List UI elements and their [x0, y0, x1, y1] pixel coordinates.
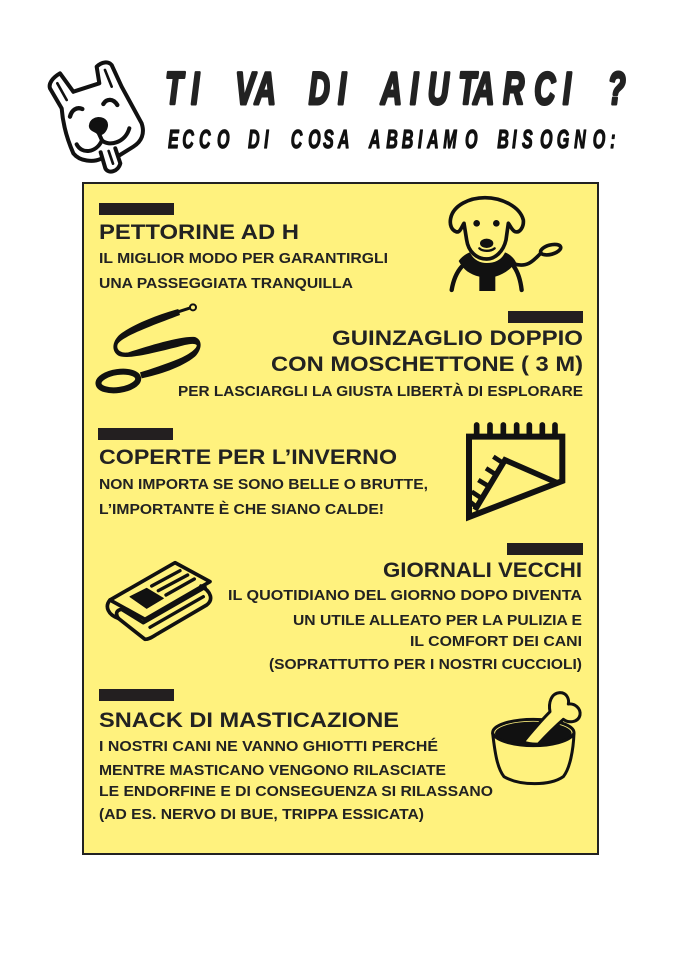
- item: giornali: IL COMFORT DEI CANI: [410, 634, 582, 650]
- item: giornali: [228, 543, 583, 673]
- item: snack: (AD ES. NERVO DI BUE, TRIPPA ESSICATA): [99, 807, 424, 823]
- item: snack: LE ENDORFINE E DI CONSEGUENZA SI RILASSANO: [99, 784, 493, 800]
- item: guinzaglio: CON MOSCHETTONE ( 3 M): [271, 353, 583, 376]
- item: coperte: NON IMPORTA SE SONO BELLE O BRUTTE,: [99, 477, 428, 493]
- item: giornali: (SOPRATTUTTO PER I NOSTRI CUCCIOLI): [269, 657, 582, 673]
- icon: blanket: [469, 425, 562, 517]
- item: snack: SNACK DI MASTICAZIONE: [99, 709, 399, 732]
- icon: leash: [97, 304, 201, 393]
- title: TIVADIAIUTARCI?: [165, 65, 626, 115]
- item: snack: I NOSTRI CANI NE VANNO GHIOTTI PERCHÉ: [99, 738, 438, 755]
- subtitle: ECCODICOSAABBIAMOBISOGNO:: [168, 124, 615, 154]
- item: snack: [99, 689, 493, 823]
- item: guinzaglio: GUINZAGLIO DOPPIO: [332, 327, 583, 350]
- item: guinzaglio: [178, 311, 583, 400]
- item: giornali: IL QUOTIDIANO DEL GIORNO DOPO DIVENTA: [228, 588, 583, 604]
- item: pettorine: [99, 203, 388, 292]
- item: giornali: UN UTILE ALLEATO PER LA PULIZIA E: [293, 613, 582, 629]
- item: pettorine: PETTORINE AD H: [99, 221, 299, 244]
- item: pettorine: UNA PASSEGGIATA TRANQUILLA: [99, 276, 354, 292]
- icon: newspaper: [107, 563, 211, 639]
- icon: dog with harness: [450, 198, 562, 291]
- panel: yellow needs list: [83, 183, 598, 854]
- item: pettorine: IL MIGLIOR MODO PER GARANTIRGLI: [99, 251, 388, 267]
- item: giornali: GIORNALI VECCHI: [383, 559, 582, 582]
- item: guinzaglio: PER LASCIARGLI LA GIUSTA LIBERTÀ DI ESPLORARE: [178, 383, 583, 400]
- item: coperte: COPERTE PER L’INVERNO: [99, 446, 397, 469]
- item: snack: MENTRE MASTICANO VENGONO RILASCIATE: [99, 763, 446, 779]
- icon: smiling dog head: [50, 62, 143, 172]
- item: coperte: L’IMPORTANTE È CHE SIANO CALDE!: [99, 501, 384, 518]
- item: coperte: [98, 428, 428, 518]
- icon: bowl with bone: [493, 693, 580, 784]
